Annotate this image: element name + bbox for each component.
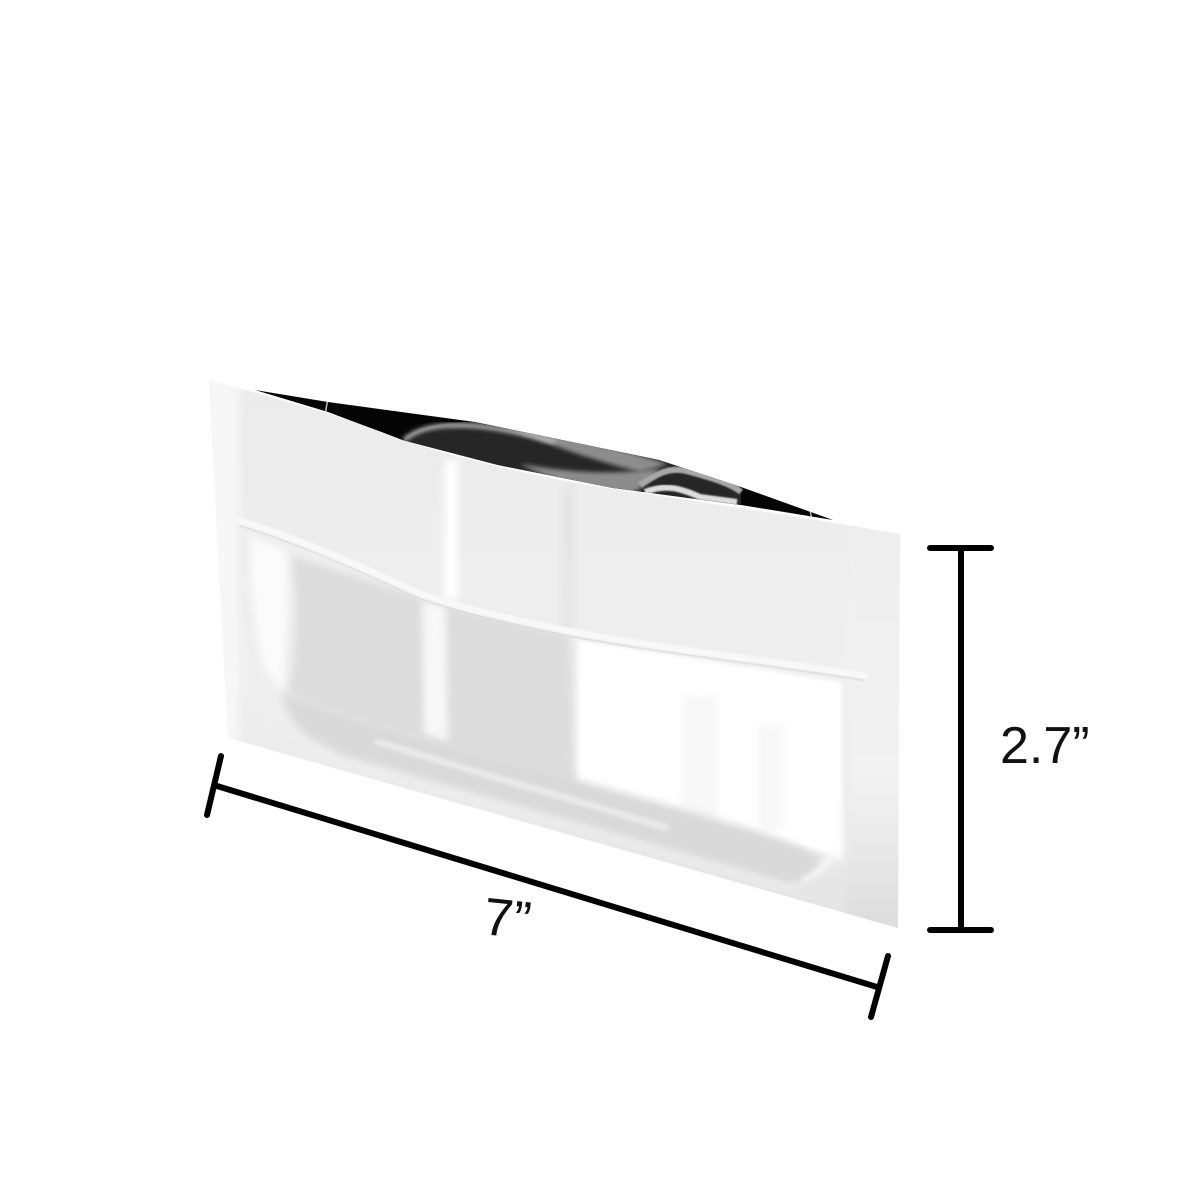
- bottom corner curve: [803, 870, 818, 880]
- window area: [245, 528, 850, 890]
- seal line: [239, 521, 865, 680]
- label: 2.7 inches: 2.7”: [1000, 717, 1090, 775]
- infographic: pouch with dimensions: [204, 380, 1088, 1020]
- label: 7 inches: 7”: [481, 887, 534, 951]
- panel highlights and side margins: [205, 370, 916, 950]
- dimension: width 7 inches: [207, 756, 888, 1017]
- pouch opening: dark interior: [255, 390, 833, 520]
- bottom gusset shadow: [283, 692, 822, 884]
- pouch front panel: [205, 370, 916, 950]
- dimension: height 2.7 inches: [930, 548, 1090, 930]
